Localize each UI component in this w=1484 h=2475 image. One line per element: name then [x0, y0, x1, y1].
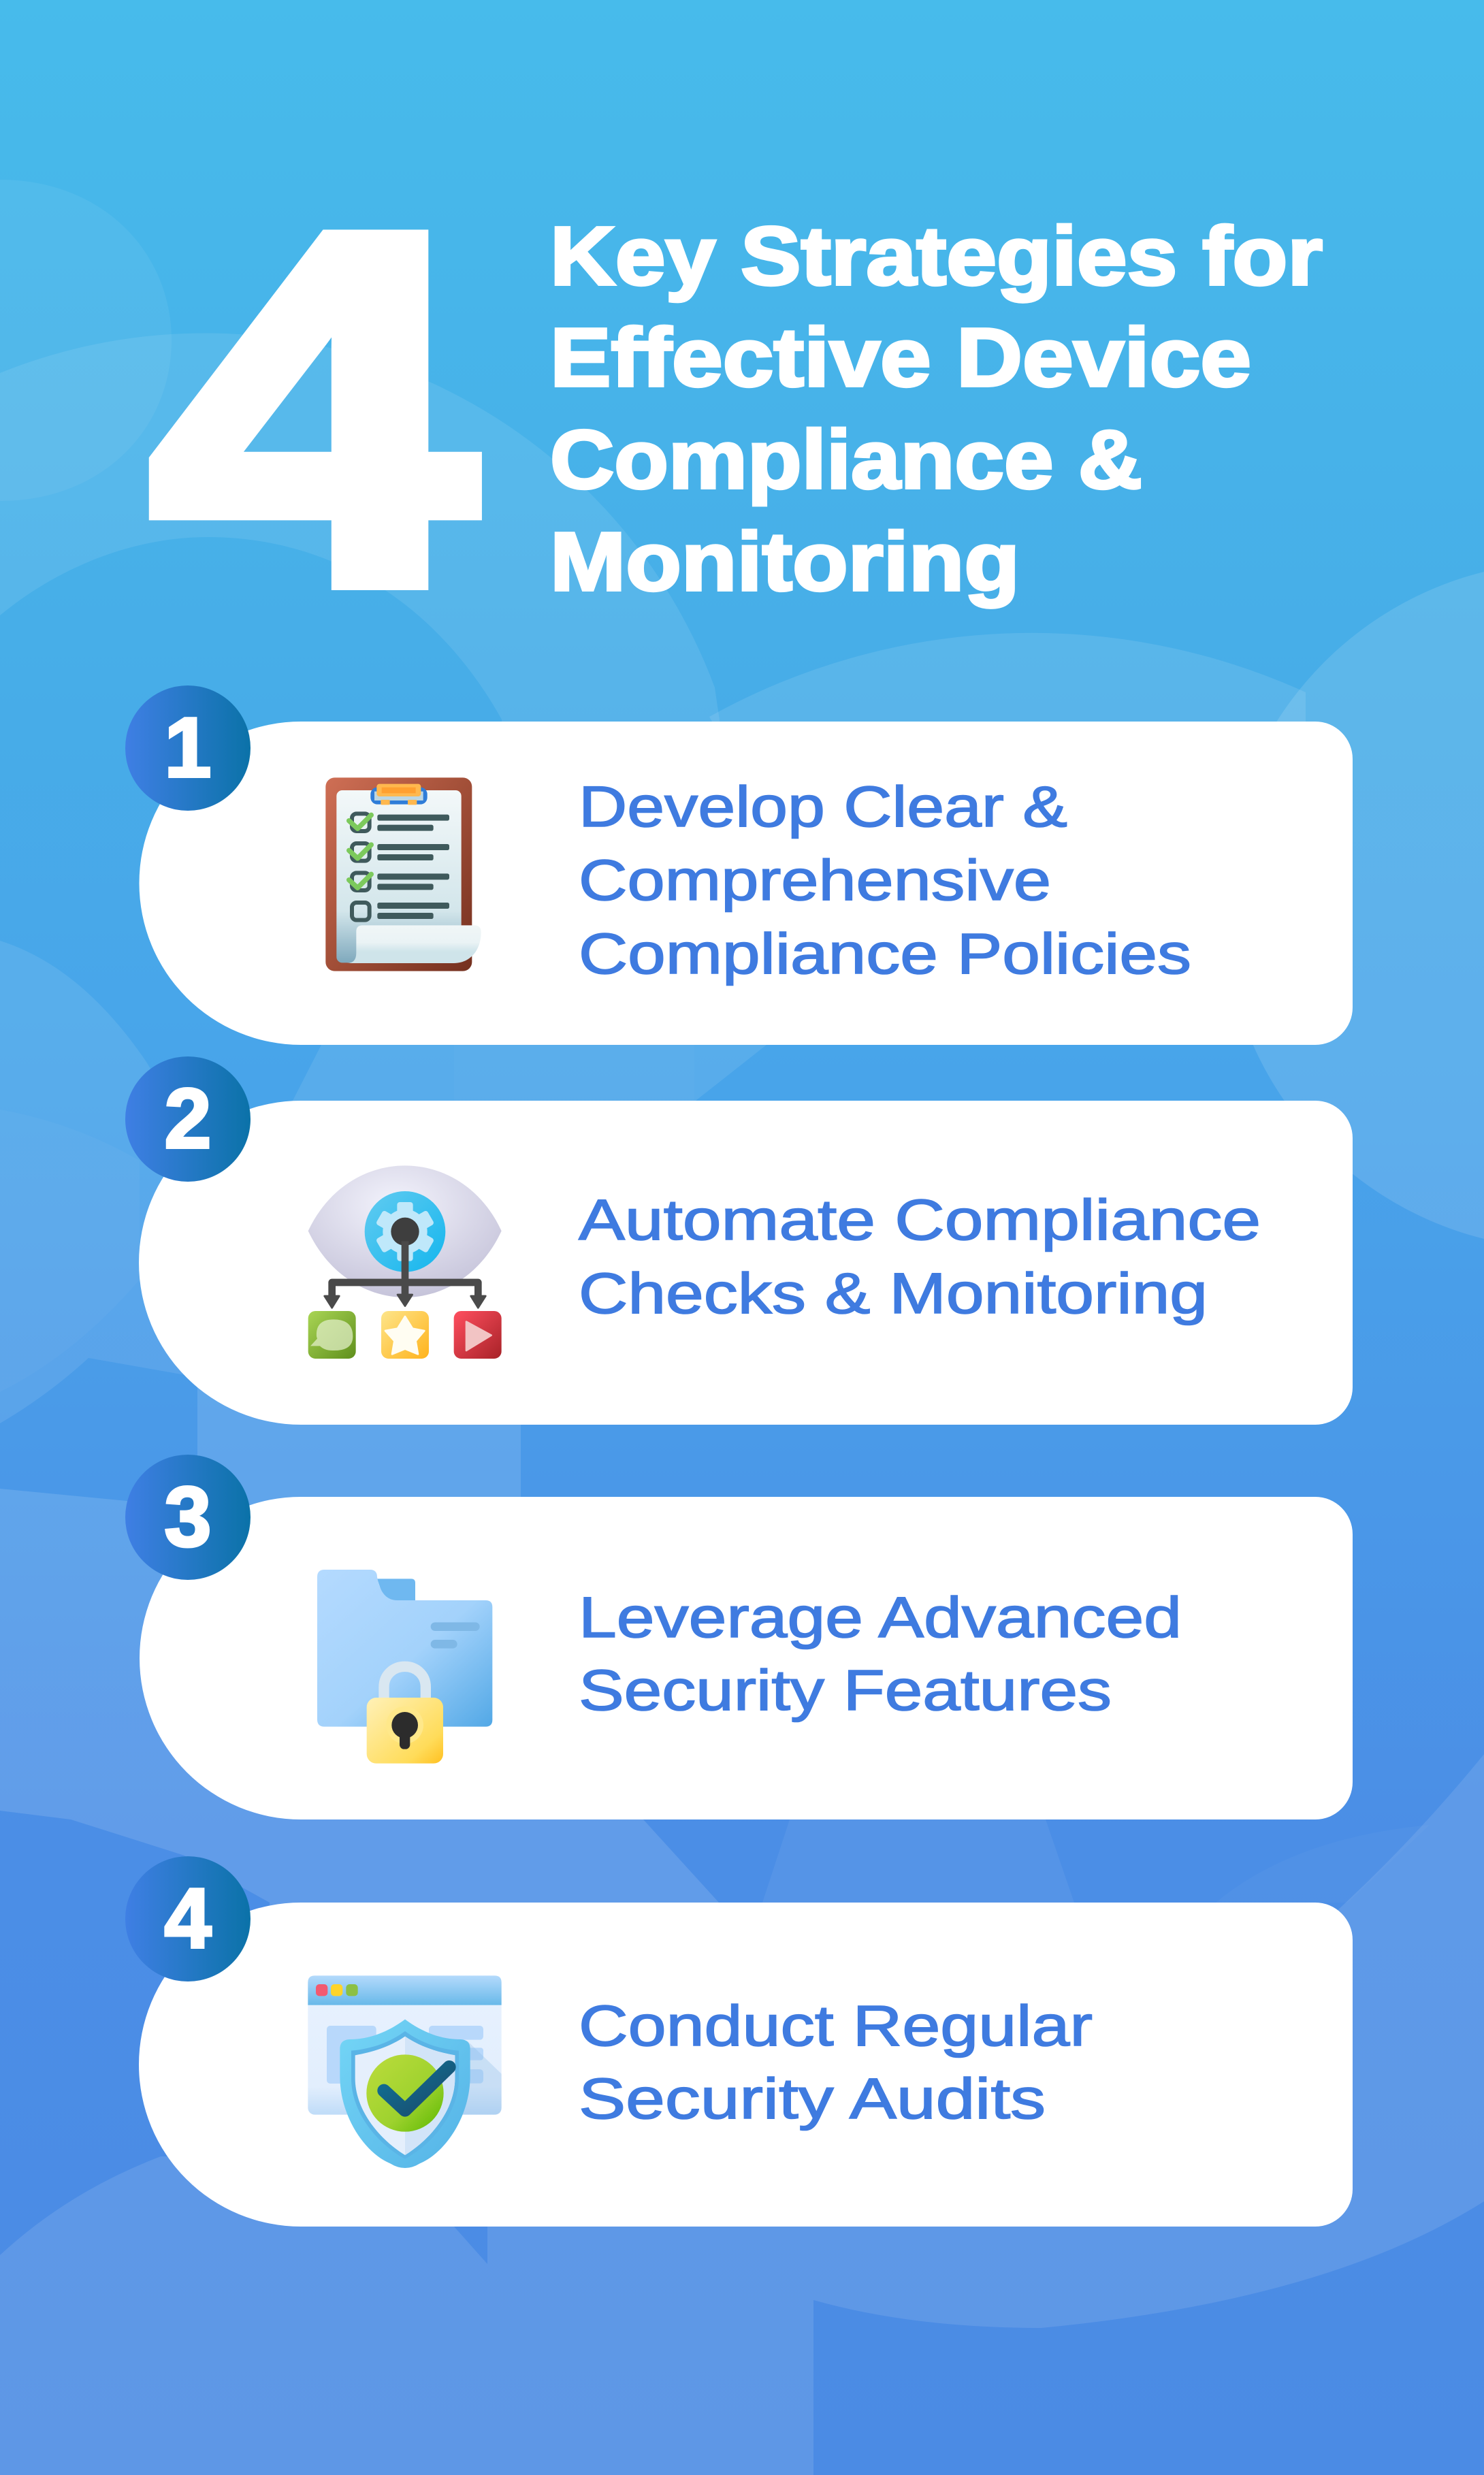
text: strategy 4: [579, 1994, 1093, 2131]
icon: clipboard checklist: [325, 777, 481, 971]
title: Monitoring: [550, 515, 1020, 608]
icon: eye with flow chart: [308, 1165, 502, 1359]
panel: strategy 3: [125, 1455, 1353, 1819]
icon: folder with padlock: [317, 1570, 492, 1764]
text: strategy 4: Security Audits: [579, 2067, 1046, 2131]
text: strategy 2: Checks & Monitoring: [579, 1261, 1208, 1325]
number badge 2: [125, 1056, 251, 1182]
title: Compliance &: [550, 413, 1142, 506]
title: Effective Device: [550, 311, 1251, 404]
number badge 1: 1: [165, 701, 211, 795]
text: strategy 1: Develop Clear &: [579, 775, 1067, 839]
card 4 background: [139, 1903, 1353, 2227]
card 1 background: [139, 722, 1353, 1045]
title: [550, 210, 1323, 608]
number badge 3: 3: [165, 1470, 211, 1564]
text: strategy 3: Leverage Advanced: [579, 1585, 1182, 1649]
text: strategy 4: Conduct Regular: [579, 1994, 1093, 2058]
panel: strategy 2: [125, 1056, 1353, 1425]
big numeral 4: 4: [150, 131, 479, 687]
text: strategy 1: Compliance Policies: [579, 922, 1191, 986]
card 2 background: [139, 1101, 1353, 1425]
text: strategy 3: Security Features: [579, 1658, 1112, 1722]
panel: strategy 4: [125, 1856, 1353, 2227]
number badge 1: [125, 685, 251, 811]
card 3 background: [140, 1497, 1353, 1819]
number badge 2: 2: [165, 1072, 211, 1166]
text: strategy 2: [579, 1188, 1261, 1325]
number badge 4: 4: [165, 1872, 212, 1966]
panel: strategy 1: [125, 685, 1353, 1045]
text: strategy 1: [579, 775, 1191, 986]
text: strategy 2: Automate Compliance: [579, 1188, 1261, 1252]
text: strategy 3: [579, 1585, 1182, 1722]
number badge 4: [125, 1856, 251, 1981]
number badge 3: [125, 1455, 251, 1580]
title: Key Strategies for: [550, 210, 1323, 302]
text: strategy 1: Comprehensive: [579, 848, 1051, 912]
icon: browser window with shield: [308, 1975, 502, 2168]
